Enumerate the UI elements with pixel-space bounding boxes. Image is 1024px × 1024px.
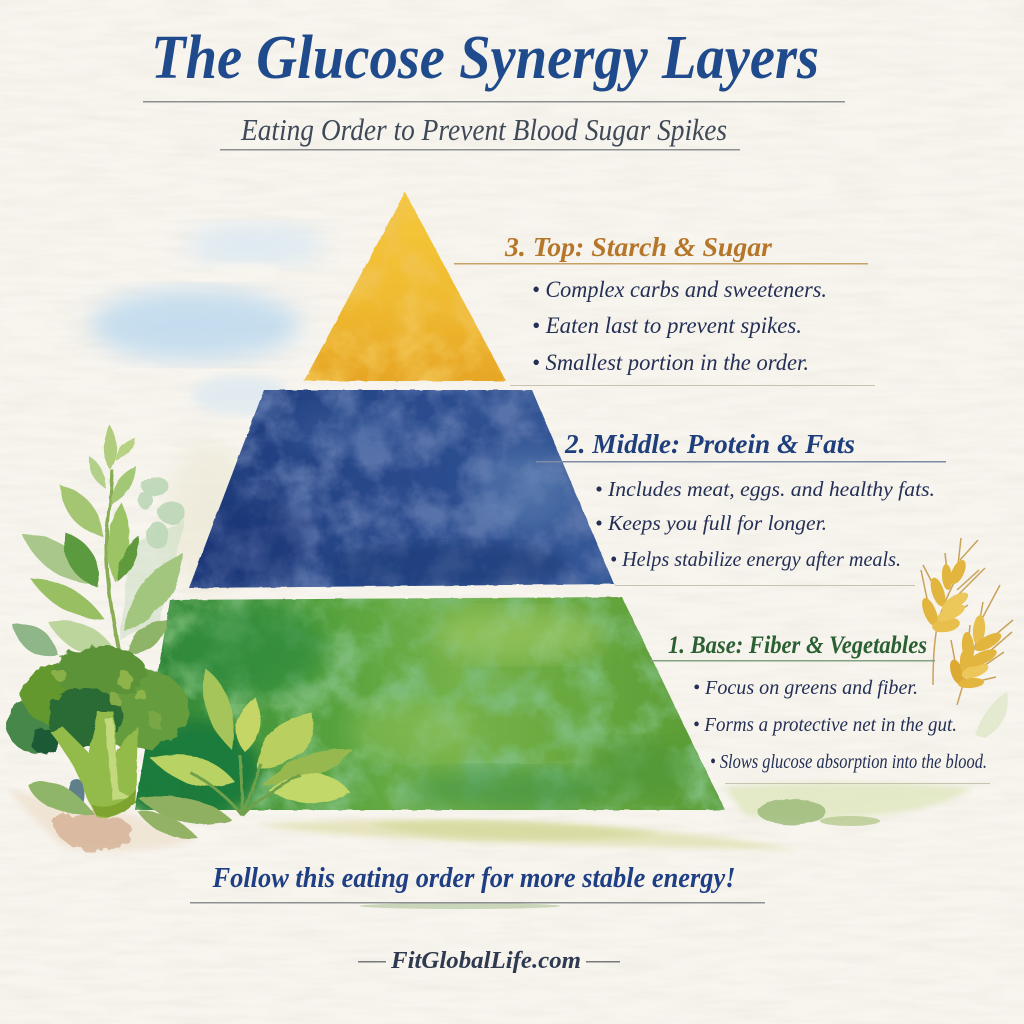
section: top starch and sugar (454, 232, 875, 386)
footer website: FitGlobalLife.com (390, 948, 581, 974)
sky wash (90, 223, 325, 415)
pyramid layer: middle protein and fats (185, 388, 617, 590)
wash behind pyramid lower left (165, 445, 255, 595)
icon: front leaves (150, 668, 353, 816)
call to action: Follow this eating order for more stable energy! (212, 862, 735, 894)
pyramid layer: base fiber and vegetables (120, 595, 730, 820)
icon: broccoli (7, 646, 232, 838)
bullets: base: • Forms a protective net in the gut. (693, 714, 957, 736)
icon: wheat stalks (919, 538, 1013, 738)
heading: top: 3. Top: Starch & Sugar (504, 232, 773, 262)
bullets: top: • Complex carbs and sweeteners. (532, 277, 827, 302)
section: middle protein and fats (536, 429, 946, 586)
icon: leafy plant left (13, 425, 186, 656)
pale herb background (120, 477, 186, 640)
bullets: top (532, 277, 827, 375)
broccoli crown (7, 646, 189, 754)
title: The Glucose Synergy Layers (151, 24, 819, 92)
bullets: base: • Focus on greens and fiber. (693, 677, 918, 699)
bullets: middle: • Keeps you full for longer. (595, 511, 827, 535)
bullets: base (693, 677, 987, 773)
bullets: top: • Eaten last to prevent spikes. (532, 313, 802, 338)
broccoli stalk (50, 712, 138, 818)
subtitle: Eating Order to Prevent Blood Sugar Spikes (240, 112, 727, 147)
bullets: top: • Smallest portion in the order. (532, 350, 809, 375)
heading: base: 1. Base: Fiber & Vegetables (668, 632, 927, 659)
bullets: middle: • Helps stabilize energy after meals. (610, 547, 901, 571)
bullets: middle (595, 477, 935, 571)
pyramid (120, 190, 730, 820)
lower leaves (28, 781, 232, 838)
pyramid layer: top starch and sugar (300, 190, 510, 385)
section: base fiber and vegetables (650, 632, 990, 784)
bullets: middle: • Includes meat, eggs. and healthy fats. (595, 477, 935, 501)
ground wash (8, 783, 972, 909)
heading: middle: 2. Middle: Protein & Fats (564, 429, 855, 459)
